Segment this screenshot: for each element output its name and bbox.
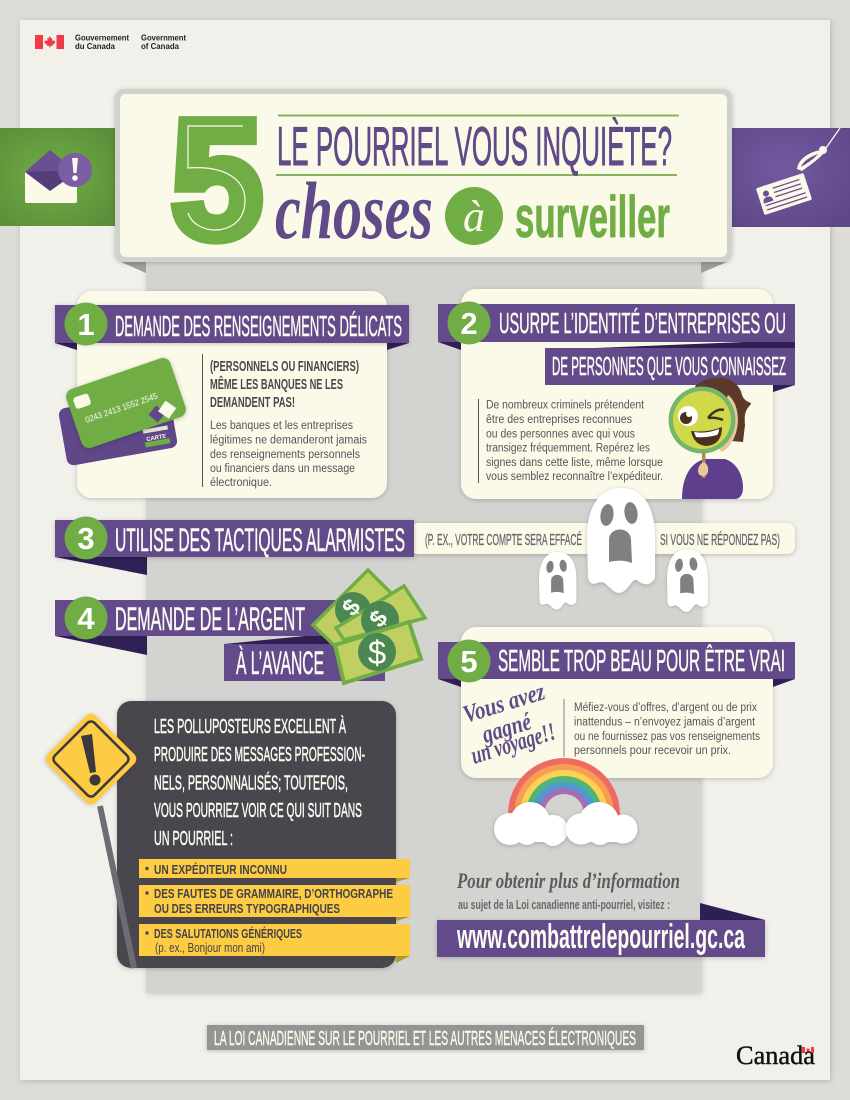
- body text: légitimes ne demanderont jamais: [210, 434, 367, 446]
- government of Canada signature: of Canada: [141, 42, 180, 51]
- list item: generic greetings: [139, 924, 410, 956]
- ribbon upper: [438, 304, 795, 342]
- parenthetical pill: [410, 523, 795, 554]
- icon: banknotes: $: [368, 634, 386, 671]
- website ribbon: [437, 903, 765, 957]
- icon: warning sign: [43, 711, 139, 968]
- big number five: 5: [172, 87, 262, 273]
- body text: transigez fréquemment. Repérez les: [486, 442, 650, 454]
- subheading: (PERSONNELS OU FINANCIERS): [210, 358, 359, 375]
- title rules: [276, 116, 679, 175]
- script slogan: un voyage!!: [468, 718, 559, 770]
- body text: inattendus – n’envoyez jamais d’argent: [574, 716, 756, 728]
- panel 5: too good to be true: [438, 627, 795, 846]
- number badge 3: [64, 516, 108, 560]
- number badge 5: [448, 640, 490, 682]
- text: DEMANDE DES RENSEIGNEMENTS DÉLICATS: [115, 310, 402, 343]
- icon: credit cards: 0243 2413 1552 2545: [84, 391, 159, 425]
- icon: small ghost right: [667, 549, 708, 612]
- body text: [210, 420, 367, 489]
- Canada wordmark: Canada: [736, 1041, 815, 1070]
- script slogan: gagné: [478, 708, 535, 749]
- body text: ou financiers dans un message: [210, 463, 355, 475]
- ribbon fold: [55, 557, 147, 575]
- list item: generic greetings: DES SALUTATIONS GÉNÉRIQUES: [154, 926, 302, 941]
- number badge 4: 4: [77, 601, 95, 636]
- list item: unknown sender: [139, 859, 410, 878]
- body text: ou des personnes avec qui vous: [486, 428, 635, 440]
- panel 3: scare tactics: UTILISE DES TACTIQUES ALARMISTES: [115, 522, 405, 558]
- warning intro text: VOUS POURRIEZ VOIR CE QUI SUIT DANS: [154, 799, 362, 822]
- body text: De nombreux criminels prétendent: [486, 400, 645, 412]
- script slogan: [460, 678, 559, 770]
- icon: credit cards: CARTE: [146, 434, 167, 443]
- divider: [563, 699, 565, 757]
- government of Canada signature: du Canada: [75, 42, 116, 51]
- list item: spelling mistakes: OU DES ERREURS TYPOGRAPHIQUES: [154, 901, 340, 916]
- title fold shadow right: [701, 262, 727, 273]
- panel: warning box: [117, 701, 410, 968]
- body text: ou ne fournissez pas vos renseignements: [574, 731, 760, 743]
- warning intro text: LES POLLUPOSTEURS EXCELLENT À: [154, 715, 346, 738]
- list item: spelling mistakes: DES FAUTES DE GRAMMAIRE, D’ORTHOGRAPHE: [154, 886, 393, 901]
- list item: unknown sender: UN EXPÉDITEUR INCONNU: [154, 862, 287, 877]
- number badge 2: [448, 302, 490, 344]
- number badge 1: 1: [77, 307, 95, 342]
- panel 4: advance money: À L’AVANCE: [236, 645, 324, 681]
- parenthetical text left: (P. EX., VOTRE COMPTE SERA EFFACÉ: [425, 530, 582, 549]
- ribbon: [438, 642, 795, 679]
- ribbon: [55, 305, 409, 343]
- ribbon folds: [438, 340, 795, 392]
- government of Canada signature: [35, 34, 186, 51]
- title word choses: choses: [275, 165, 433, 256]
- body text: [486, 400, 663, 483]
- ribbon folds: [55, 343, 409, 350]
- panel 4: advance money: [55, 570, 425, 683]
- icon: big ghost: [587, 488, 655, 593]
- title fold shadows: [121, 262, 146, 273]
- ribbon folds: [396, 878, 410, 963]
- bottom tagline: [207, 1025, 644, 1050]
- heading 4 line one: DEMANDE DE L’ARGENT: [115, 601, 305, 637]
- divider: [478, 399, 480, 483]
- body text: personnels pour recevoir un prix.: [574, 745, 731, 757]
- icon: banknotes: $: [337, 593, 367, 621]
- panel: warning box: PRODUIRE DES MESSAGES PROFESSION-: [154, 743, 365, 766]
- warning intro text: NELS, PERSONNALISÉS; TOUTEFOIS,: [154, 772, 348, 794]
- body text: Méfiez-vous d’offres, d’argent ou de prix: [574, 702, 757, 714]
- body text: être des entreprises reconnues: [486, 414, 632, 426]
- script slogan: Vous avez: [460, 678, 548, 729]
- number badge 4: [64, 596, 108, 640]
- number badge 3: 3: [77, 521, 95, 556]
- ribbon upper: [55, 600, 345, 636]
- panel 2: identity impersonation: [438, 289, 795, 499]
- government of Canada signature: Government: [141, 34, 186, 42]
- body text: vous semblez reconnaître l’expéditeur.: [486, 471, 663, 483]
- icon: rainbow with clouds: [494, 758, 638, 846]
- central grey column: [146, 250, 701, 993]
- purple band with phishing hook icon: [730, 128, 850, 227]
- number badge 2: 2: [460, 306, 478, 341]
- subheading: MÊME LES BANQUES NE LES: [210, 375, 343, 393]
- circle with letter a: à: [463, 192, 485, 241]
- body text: des renseignements personnels: [210, 449, 360, 461]
- panel 1: sensitive information: [55, 291, 409, 498]
- ribbon folds: [438, 679, 795, 687]
- number badge 1: [64, 302, 108, 346]
- icon: banknotes: [313, 570, 425, 683]
- green band with envelope icon: [0, 128, 118, 226]
- body text: signes dans cette liste, même lorsque: [486, 457, 663, 469]
- ribbon: [55, 520, 414, 557]
- list item: spelling mistakes: [139, 885, 410, 917]
- ribbon folds: [55, 636, 345, 655]
- body text: [574, 702, 760, 757]
- warning intro text: UN POURRIEL :: [154, 827, 233, 850]
- ribbon lower: [545, 348, 795, 385]
- icon: banknotes: $: [364, 605, 394, 633]
- more information heading: Pour obtenir plus d’information: [456, 868, 680, 893]
- list item: generic greetings: (p. ex., Bonjour mon ami): [155, 941, 265, 955]
- icon: credit cards: [58, 356, 188, 466]
- ribbon lower: [224, 644, 385, 681]
- title word surveiller: surveiller: [515, 185, 670, 250]
- government of Canada signature: Gouvernement: [75, 34, 129, 42]
- icon: person with smiling mask: [668, 378, 751, 499]
- more information subheading: au sujet de la Loi canadienne anti-pourriel, visitez :: [458, 898, 670, 912]
- panel 3: scare tactics: [55, 488, 795, 612]
- body text: électronique.: [210, 477, 272, 489]
- icon: small ghost left: [539, 552, 576, 610]
- subheading: [210, 358, 359, 411]
- subheading: DEMANDENT PAS!: [210, 394, 295, 411]
- title panel: [115, 87, 732, 273]
- body text: Les banques et les entreprises: [210, 420, 353, 432]
- circle with letter a: [445, 187, 503, 245]
- warning intro text: [154, 715, 365, 850]
- number badge 5: 5: [460, 644, 478, 679]
- divider: [202, 354, 204, 487]
